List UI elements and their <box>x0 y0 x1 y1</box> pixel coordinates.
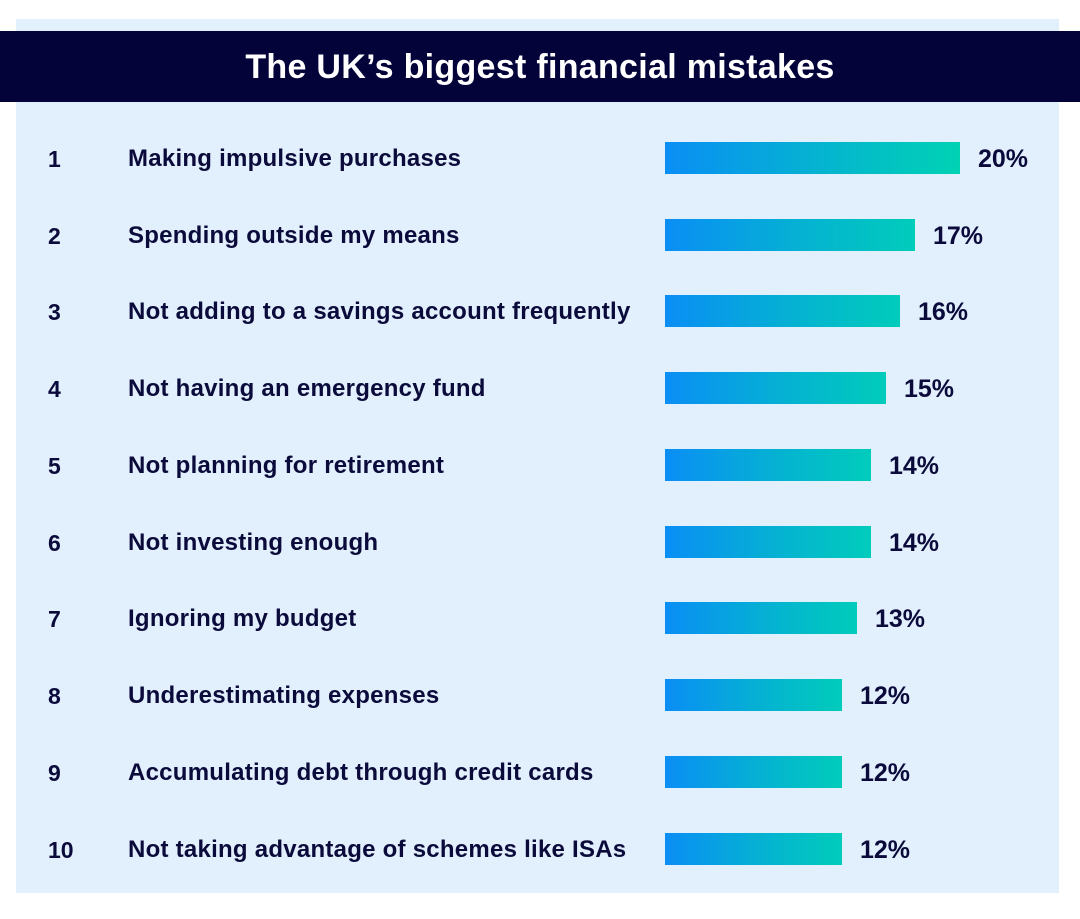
row 9 <box>48 756 910 788</box>
row 5 <box>48 449 939 481</box>
row 8 <box>48 679 910 711</box>
row 10: 10 <box>48 837 74 863</box>
row 6 <box>48 526 939 558</box>
row 4: Not having an emergency fund <box>128 375 486 402</box>
row 7 <box>48 602 925 634</box>
row 8: 12% <box>860 682 910 710</box>
row 10: 12% <box>860 836 910 864</box>
row 3: Not adding to a savings account frequently <box>128 298 631 325</box>
row 1: Making impulsive purchases <box>128 145 461 172</box>
row 9: Accumulating debt through credit cards <box>128 759 594 786</box>
row 2: 2 <box>48 223 61 249</box>
row 1: 1 <box>48 146 61 172</box>
row 8: 8 <box>48 683 61 709</box>
row 7: 7 <box>48 606 61 632</box>
row 2 <box>48 219 983 251</box>
row 3 <box>48 295 968 327</box>
row 5: 5 <box>48 453 61 479</box>
title <box>0 31 1080 102</box>
row 8: Underestimating expenses <box>128 682 439 709</box>
row 6: 6 <box>48 530 61 556</box>
row 10: Not taking advantage of schemes like ISAs <box>128 836 626 863</box>
row 6: 14% <box>889 529 939 557</box>
title: The UK’s biggest financial mistakes <box>245 48 835 86</box>
row 9: 12% <box>860 759 910 787</box>
row 3: 3 <box>48 299 61 325</box>
row 3: 16% <box>918 298 968 326</box>
row 5: 14% <box>889 452 939 480</box>
row 5: Not planning for retirement <box>128 452 444 479</box>
row 4 <box>48 372 954 404</box>
row 2: Spending outside my means <box>128 222 460 249</box>
row 4: 15% <box>904 375 954 403</box>
row 10 <box>48 833 910 865</box>
row 1: 20% <box>978 145 1028 173</box>
row 4: 4 <box>48 376 61 402</box>
row 6: Not investing enough <box>128 529 378 556</box>
row 9: 9 <box>48 760 61 786</box>
row 7: 13% <box>875 605 925 633</box>
row 7: Ignoring my budget <box>128 605 356 632</box>
row 1 <box>48 142 1028 174</box>
row 2: 17% <box>933 222 983 250</box>
